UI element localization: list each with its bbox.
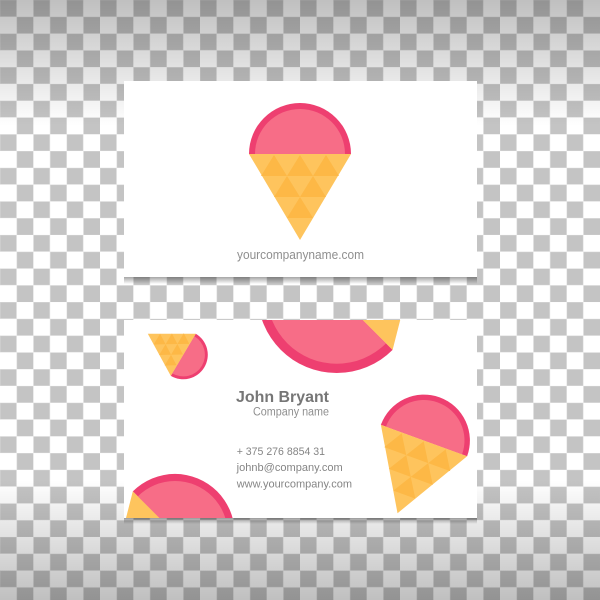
company name: Company name (253, 406, 329, 418)
icon: small ice cream top left (135, 313, 217, 388)
contact details (236, 446, 352, 490)
panel: back business card (124, 320, 477, 524)
company website text: yourcompanyname.com (237, 248, 364, 262)
icon: ice cream logo (249, 103, 351, 240)
icon: large ice cream cropped at top (262, 320, 400, 373)
contact details: johnb@company.com (236, 462, 343, 474)
contact details: + 375 276 8854 31 (237, 446, 325, 458)
icon: ice cream cropped at bottom left (126, 474, 233, 518)
panel: front business card (124, 81, 477, 284)
name: John Bryant (236, 389, 329, 406)
contact details: www.yourcompany.com (236, 478, 352, 490)
icon: ice cream right (354, 382, 483, 529)
